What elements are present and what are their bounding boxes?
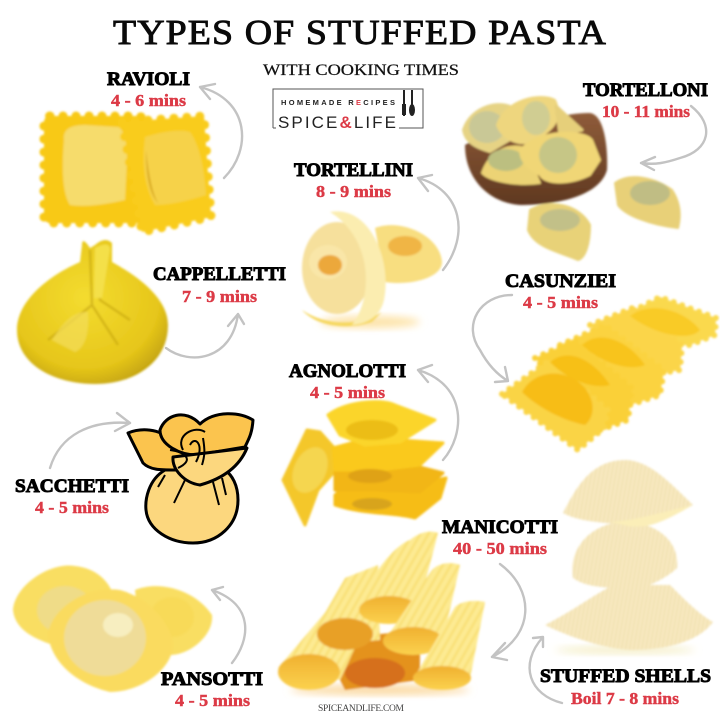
tortellini image xyxy=(302,211,442,328)
ravioli label: 4 - 6 mins xyxy=(111,91,186,110)
tortellini label xyxy=(294,160,413,201)
agnolotti label: AGNOLOTTI xyxy=(289,361,406,382)
casunziei image xyxy=(502,297,716,450)
arrow: pansotti xyxy=(212,587,245,663)
sacchetti icon xyxy=(128,414,253,543)
casunziei label xyxy=(505,271,616,312)
manicotti image xyxy=(278,532,485,695)
arrow: sacchetti xyxy=(50,413,130,468)
sacchetti label: 4 - 5 mins xyxy=(35,498,109,517)
arrow: stuffed shells xyxy=(530,637,562,703)
tortelloni label: 10 - 11 mins xyxy=(602,102,690,121)
arrow: agnolotti xyxy=(418,365,458,460)
arrow: manicotti xyxy=(492,564,525,660)
pansotti image xyxy=(13,566,212,692)
sacchetti label xyxy=(15,476,129,517)
agnolotti image xyxy=(283,402,446,525)
stuffed shells label: Boil 7 - 8 mins xyxy=(571,689,679,708)
pansotti label: PANSOTTI xyxy=(161,669,263,690)
cappelletti label: 7 - 9 mins xyxy=(182,287,257,306)
cappelletti label xyxy=(153,264,286,306)
pansotti label xyxy=(161,669,263,710)
tortellini label: TORTELLINI xyxy=(294,160,413,181)
logo: Spice and Life xyxy=(273,89,423,132)
manicotti label xyxy=(442,517,558,558)
arrow: cappelletti xyxy=(166,314,244,357)
manicotti label: 40 - 50 mins xyxy=(453,539,547,558)
casunziei label: CASUNZIEI xyxy=(505,271,616,292)
sacchetti label: SACCHETTI xyxy=(15,476,129,497)
ravioli label: RAVIOLI xyxy=(107,69,190,90)
arrow: casunziei xyxy=(473,295,512,382)
ravioli label xyxy=(107,69,190,110)
subtitle: WITH COOKING TIMES xyxy=(263,62,459,79)
tortelloni label xyxy=(583,80,708,121)
tortelloni label: TORTELLONI xyxy=(583,80,708,101)
arrow: ravioli xyxy=(200,84,242,178)
ravioli image xyxy=(44,116,211,232)
logo: Spice and Life: HOMEMADE R E CIPES xyxy=(281,98,395,107)
stuffed shells label xyxy=(540,666,711,708)
stuffed shells label: STUFFED SHELLS xyxy=(540,666,711,687)
stuffed shells image xyxy=(545,460,713,654)
title: TYPES OF STUFFED PASTA xyxy=(113,13,607,52)
manicotti label: MANICOTTI xyxy=(442,517,558,538)
agnolotti label: 4 - 5 mins xyxy=(310,383,385,402)
footer credit: SPICEANDLIFE.COM xyxy=(318,704,405,714)
pansotti label: 4 - 5 mins xyxy=(175,691,250,710)
cappelletti label: CAPPELLETTI xyxy=(153,264,286,285)
agnolotti label xyxy=(289,361,406,402)
logo: Spice and Life: SPICE&LIFE xyxy=(278,113,396,132)
cappelletti image xyxy=(17,240,168,384)
casunziei label: 4 - 5 mins xyxy=(523,293,598,312)
arrow: tortellini xyxy=(418,175,459,270)
arrow: tortelloni xyxy=(641,106,706,170)
tortelloni image xyxy=(463,97,680,260)
tortellini label: 8 - 9 mins xyxy=(316,182,391,201)
